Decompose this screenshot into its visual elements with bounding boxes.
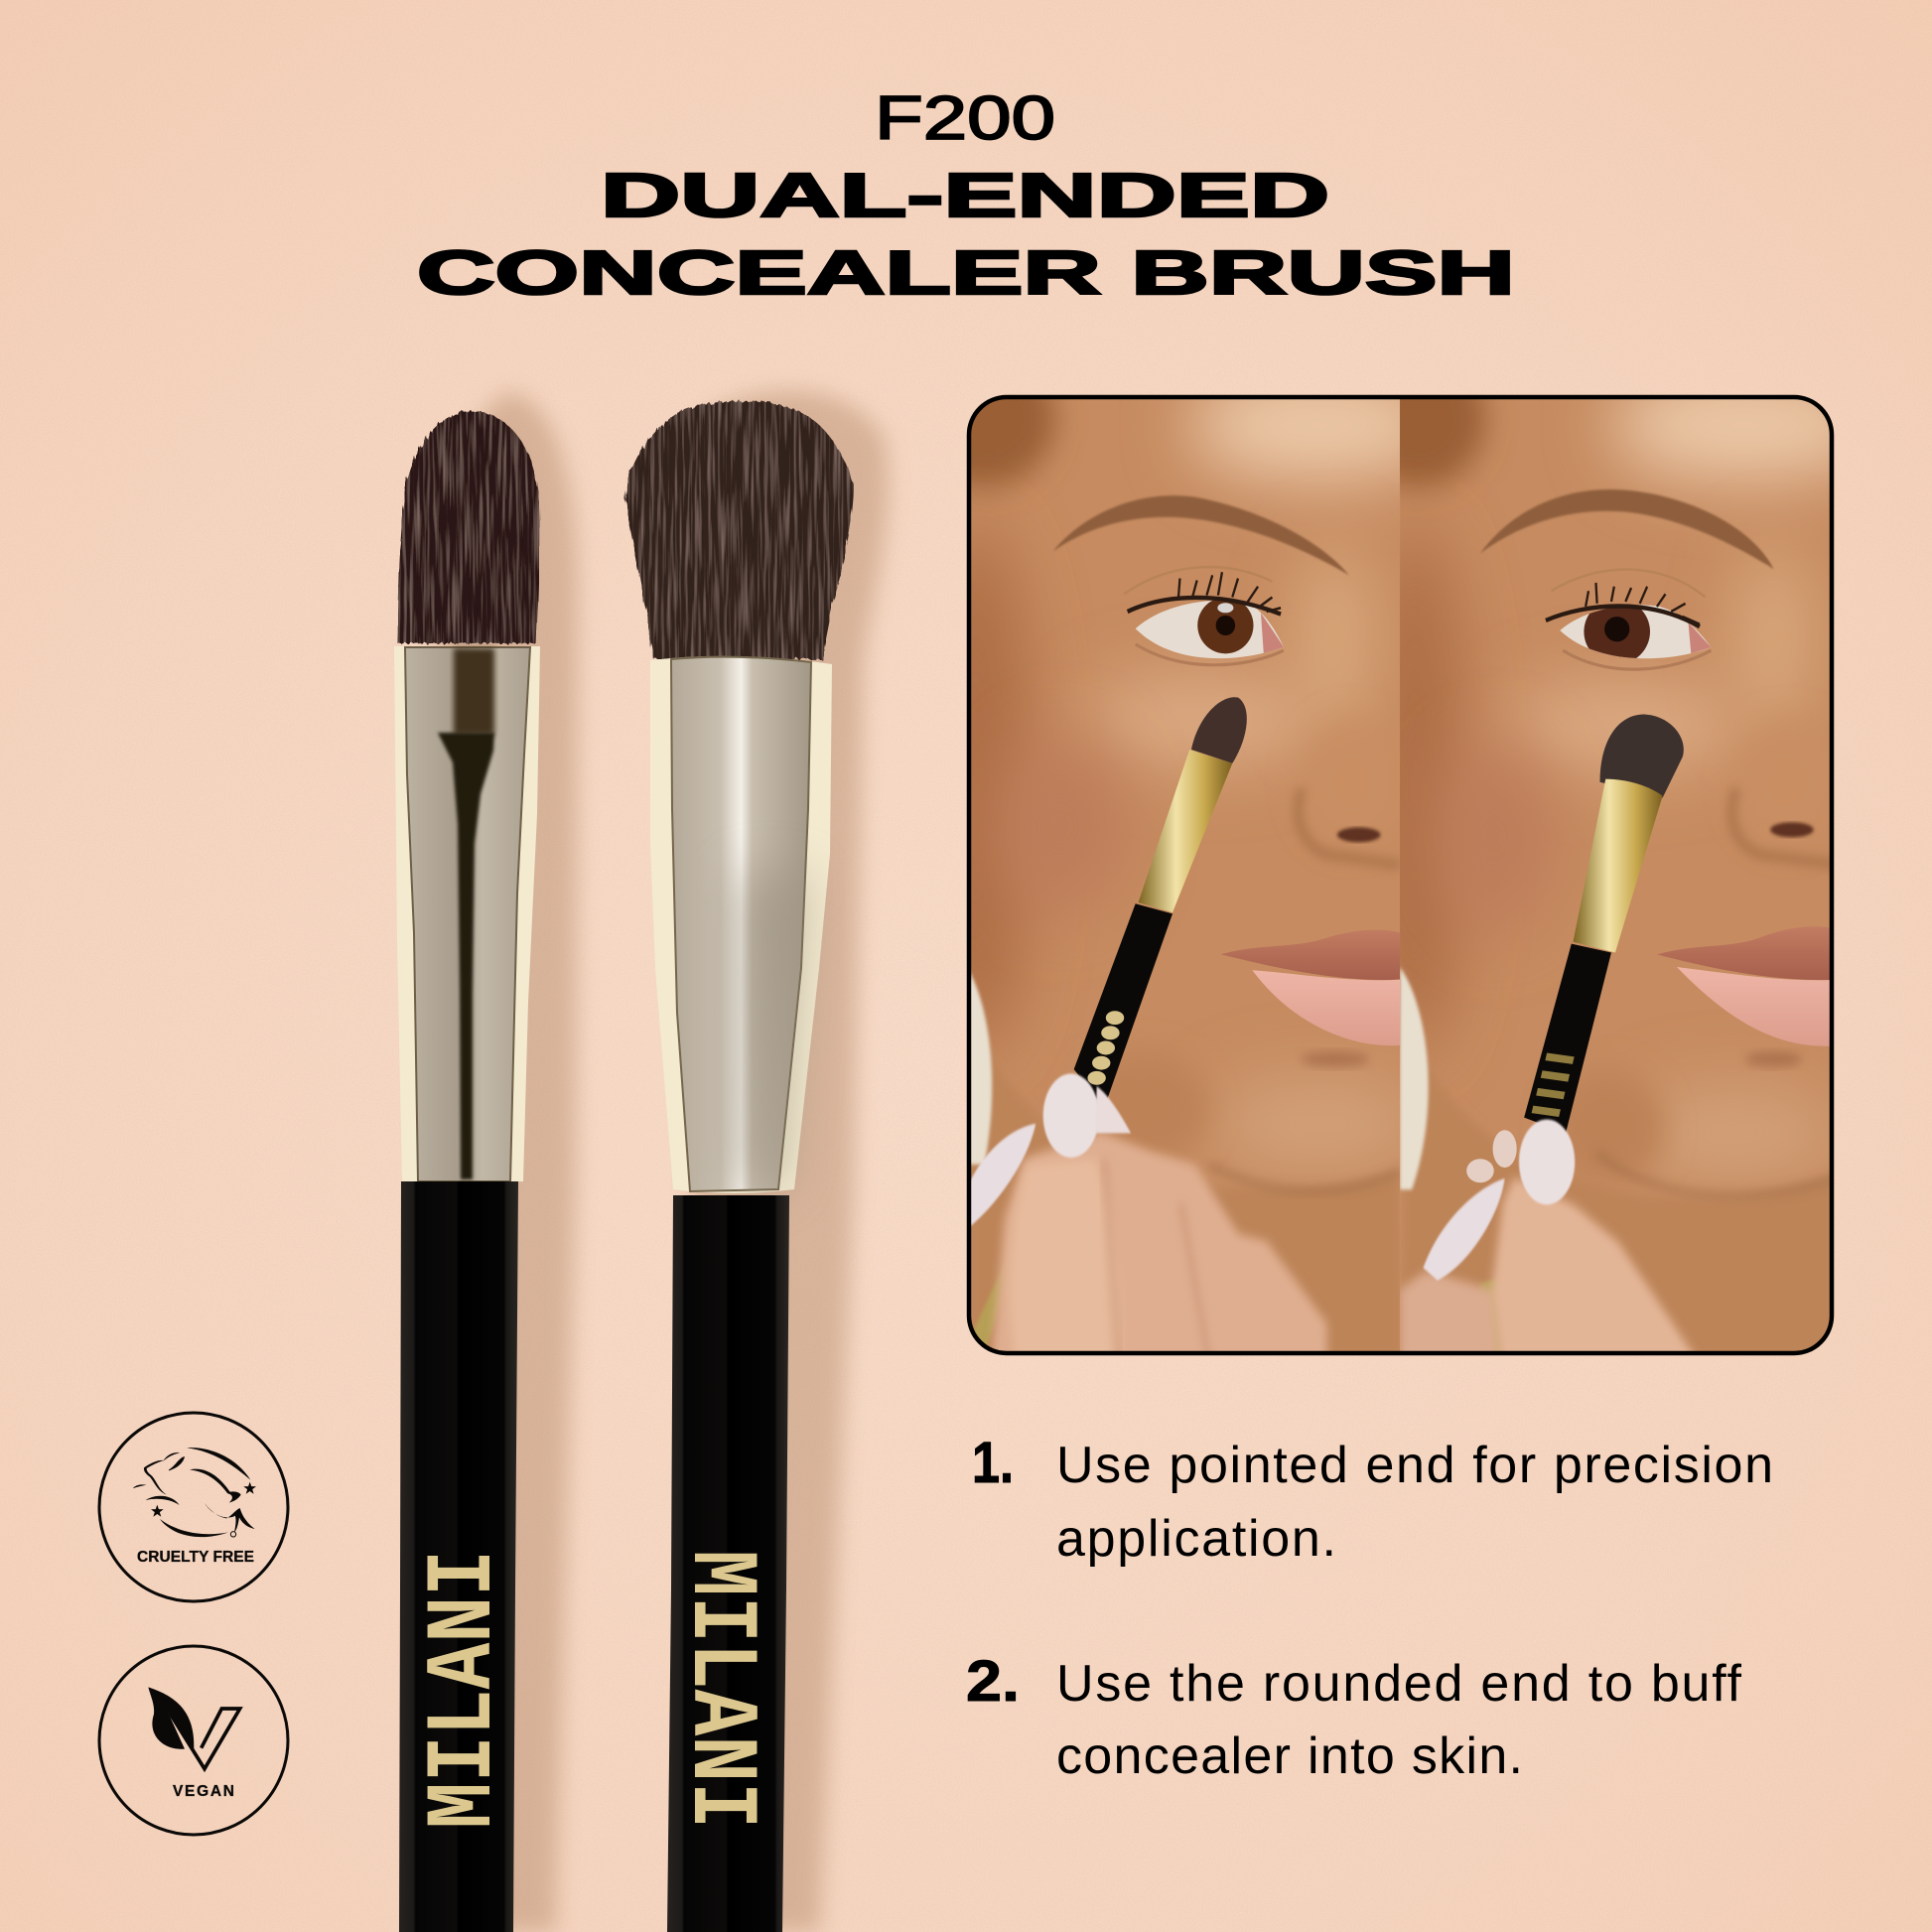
step number: 1. [972, 1431, 1014, 1495]
step text: concealer into skin. [1056, 1727, 1523, 1785]
lips [1221, 930, 1400, 1066]
badge label: CRUELTY FREE [137, 1549, 254, 1566]
eye [1546, 569, 1711, 669]
step number: 2. [966, 1649, 1020, 1714]
brush shadows [437, 391, 889, 1932]
nose [1732, 720, 1842, 865]
eyebrow [1480, 489, 1774, 569]
badge: vegan [99, 1646, 288, 1835]
eyebrow [1052, 495, 1349, 575]
photo: pointed end application [971, 399, 1400, 1351]
title line one: DUAL-ENDED [601, 162, 1329, 230]
brush: pointed end [394, 411, 540, 1932]
handle lettering [1087, 1011, 1124, 1085]
photo panel [967, 395, 1835, 1356]
holding fingers [969, 1073, 1327, 1365]
bristles [624, 401, 854, 659]
title [417, 84, 1515, 308]
icon: leaping bunny [133, 1448, 256, 1537]
step text: Use the rounded end to buff [1056, 1655, 1742, 1713]
handle [399, 1181, 518, 1932]
brand wordmark: MILANI [411, 1550, 518, 1829]
step text: application. [1056, 1510, 1336, 1568]
handle lettering [1532, 1053, 1575, 1117]
step text: Use pointed end for precision [1056, 1437, 1773, 1494]
badge: cruelty free [99, 1413, 288, 1601]
product code: F200 [875, 84, 1055, 153]
applied brush [1464, 715, 1684, 1365]
brush: rounded end [624, 401, 854, 1932]
lips [1657, 926, 1840, 1066]
photo: rounded end application [1400, 399, 1830, 1351]
holding fingers [1400, 1119, 1701, 1365]
badge label: VEGAN [173, 1783, 234, 1800]
ferrule [650, 656, 832, 1193]
handle [667, 1195, 789, 1932]
nose [1292, 786, 1400, 872]
step two [966, 1649, 1742, 1785]
eye [1124, 567, 1284, 665]
bristles [397, 411, 539, 643]
brand wordmark: MILANI [666, 1550, 773, 1829]
ferrule [394, 646, 540, 1181]
panel border [969, 397, 1832, 1353]
applied brush [969, 697, 1247, 1346]
step one [972, 1431, 1773, 1568]
icon: leaf and v [148, 1687, 240, 1769]
title line two: CONCEALER BRUSH [417, 239, 1515, 308]
